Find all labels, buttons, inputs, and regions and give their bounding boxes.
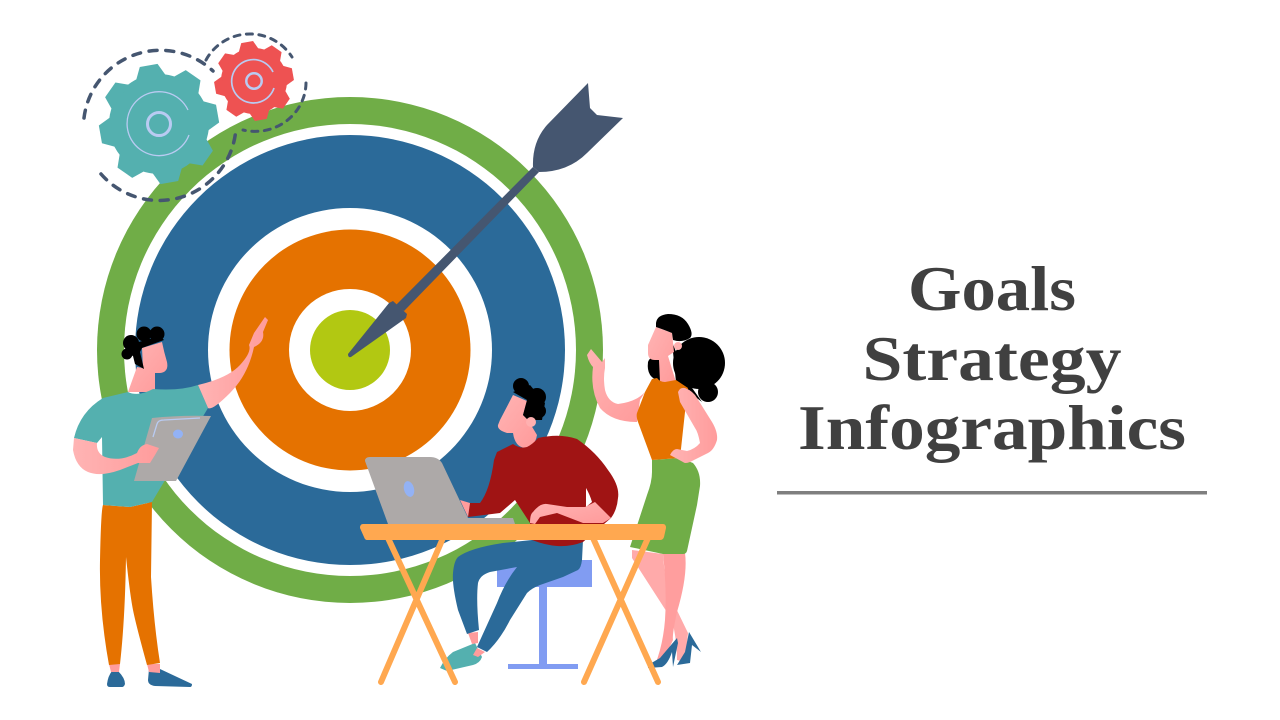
neck and face: [128, 342, 167, 392]
hair: [513, 378, 546, 420]
arrow shaft: [396, 167, 539, 311]
t-shirt: [74, 385, 208, 507]
back leg: [632, 550, 688, 662]
ring: green outer: [97, 97, 603, 603]
arrow: [348, 83, 623, 357]
shoe: [440, 643, 482, 671]
bullseye: [310, 310, 390, 390]
typing hand: [460, 500, 470, 517]
skirt: [630, 458, 700, 554]
hair bun: [648, 337, 725, 402]
ear: [674, 342, 682, 350]
ring: white gap: [124, 124, 576, 576]
title: [798, 253, 1186, 463]
shoes: [107, 669, 192, 687]
title underline: [777, 491, 1207, 494]
ring: white centre gap: [289, 289, 411, 411]
neck and face: [648, 327, 676, 382]
ring: white inner gap: [208, 208, 492, 492]
table top: [360, 524, 666, 540]
hair: [122, 326, 164, 369]
pointing arm: [198, 317, 268, 408]
arrow head: [348, 301, 407, 357]
trousers: [453, 540, 583, 652]
dashed orbit: small: [206, 34, 306, 131]
shoes: heels: [648, 632, 701, 668]
icon: teal gear: [98, 63, 220, 185]
title line 2: Strategy: [862, 323, 1122, 394]
ring: orange: [230, 230, 470, 470]
ankles: [109, 664, 160, 673]
top hair: [656, 314, 692, 341]
title line 1: Goals: [908, 253, 1076, 324]
ankles: [468, 632, 485, 657]
title line 3: Infographics: [798, 392, 1186, 463]
hand-on-hip arm: [670, 388, 717, 463]
orange top: [637, 378, 688, 460]
holding arm: [73, 438, 159, 474]
person: seated man: [365, 378, 618, 671]
person: woman standing: [587, 314, 725, 668]
table: [360, 524, 666, 682]
table legs: [381, 538, 658, 682]
sweater: [468, 436, 618, 546]
stool: [497, 560, 592, 669]
neck and face: [498, 395, 537, 448]
sweater arm gap: [586, 488, 592, 507]
gears and dashed orbits: [84, 34, 306, 200]
target board: [97, 97, 603, 603]
ear: [526, 417, 536, 427]
ring: blue: [135, 135, 565, 565]
person: man with tablet: [73, 317, 268, 687]
raised arm: [587, 349, 645, 422]
icon: red gear: [213, 40, 295, 122]
tablet: [134, 416, 211, 481]
laptop: [365, 457, 515, 524]
dashed orbit: large: [84, 50, 236, 200]
folded arm: [530, 502, 611, 524]
arrow fletching: [533, 83, 623, 172]
trousers: [100, 502, 160, 665]
front leg: [655, 553, 686, 665]
